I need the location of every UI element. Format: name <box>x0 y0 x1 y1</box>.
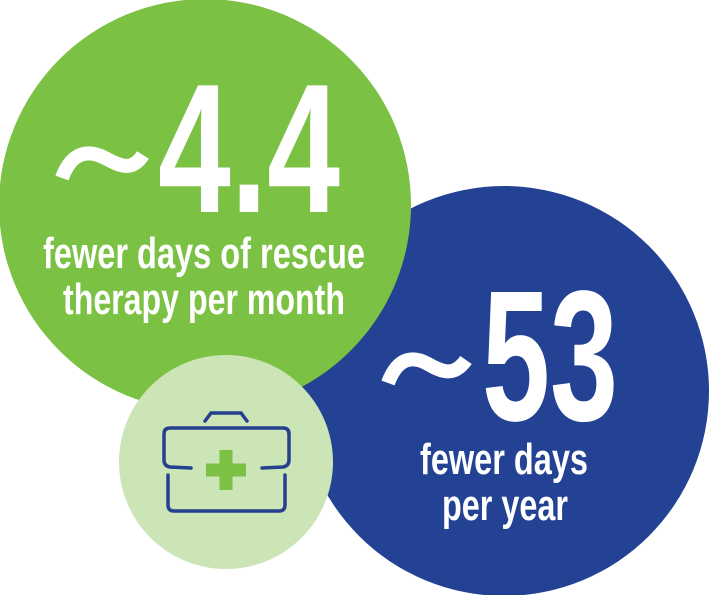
icon: tilde green <box>62 153 143 178</box>
icon: medical briefcase <box>164 413 289 511</box>
text: per year: per year <box>442 481 568 530</box>
text: fewer days: fewer days <box>420 435 588 484</box>
icon: tilde blue <box>388 359 466 383</box>
big number 4.4: 4.4 <box>158 45 340 251</box>
big number 53: 53 <box>482 253 618 460</box>
panel: green stat circle <box>0 0 411 411</box>
panel: light green icon circle <box>119 355 333 569</box>
text: rescue therapy line 1: fewer days of rescue <box>43 229 365 278</box>
text: rescue therapy line 2: therapy per month <box>63 275 345 324</box>
panel: blue stat circle <box>299 186 709 595</box>
